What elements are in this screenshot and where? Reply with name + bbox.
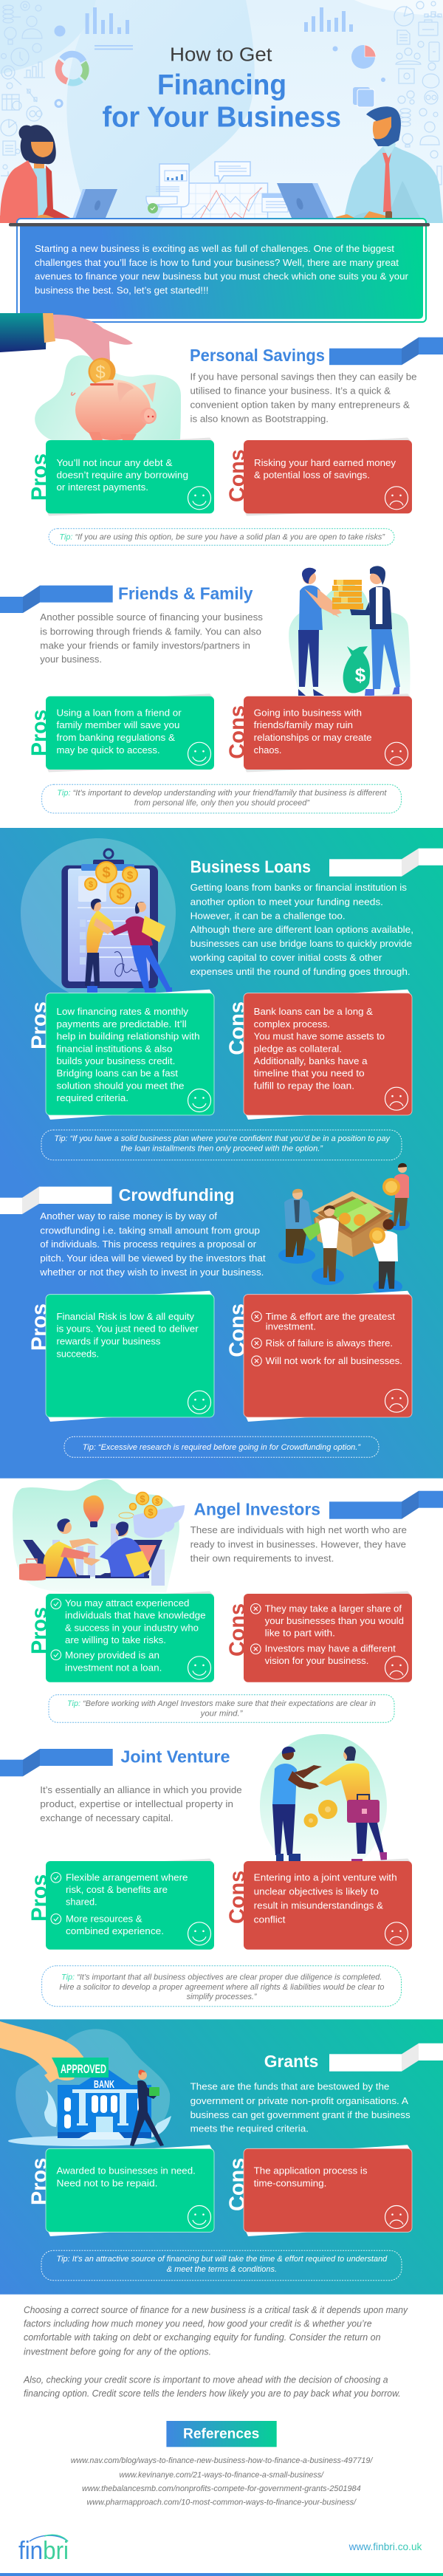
panel: pros: doesn’t require any borrowing: [56, 470, 188, 480]
panel: cons: Cons: [225, 1603, 250, 1657]
panel: pros: [27, 1291, 214, 1422]
body text: their own requirements to invest.: [190, 1552, 334, 1564]
panel: cons: Entering into a joint venture with: [254, 1872, 397, 1883]
body text: If you have personal savings then they can easily be: [190, 371, 416, 383]
section: grants: [0, 2021, 443, 2281]
panel: pros: Pros: [27, 1304, 52, 1351]
icon: sad face: [385, 1389, 408, 1412]
panel: cons: timeline that you need to: [254, 1069, 365, 1079]
panel: pros: rewards if your business: [56, 1336, 160, 1346]
references heading: References: [183, 2427, 259, 2442]
panel: cons: Investors may have a different: [265, 1643, 396, 1654]
section: joint venture: [0, 1734, 412, 2007]
tip: Tip: “If you are using this option, be sure you have a solid plan & you are open to take risks”: [59, 533, 385, 542]
panel: cons: & potential loss of savings.: [254, 470, 370, 480]
body text: It’s essentially an alliance in which you provide: [40, 1784, 242, 1795]
panel: cons: [225, 1591, 412, 1682]
ribbon: [0, 1187, 112, 1214]
panel: pros: financial institutions & also: [56, 1044, 172, 1054]
panel: pros: Awarded to businesses in need.: [56, 2166, 196, 2176]
body text: However, it can be a challenge too.: [190, 910, 346, 922]
center documents and line chart: [146, 162, 288, 223]
tip: Hire a solicitor to develop a proper agreement where all rights & liabilities would be clear to: [59, 1983, 385, 1992]
panel: pros: [27, 437, 214, 515]
heading: Angel Investors: [193, 1500, 320, 1519]
closing text: Choosing a correct source of finance for a new business is a critical task & it depends upon many: [24, 2305, 408, 2315]
body text: Getting loans from banks or financial institution is: [190, 882, 408, 893]
body text: [40, 1784, 242, 1823]
tip: [49, 1695, 394, 1722]
tip: your mind.”: [200, 1710, 244, 1719]
tip: Tip: “Before working with Angel Investors make sure that their expectations are clear in: [67, 1699, 376, 1708]
panel: introduction: business the best. So, let’s get started!!!: [35, 285, 208, 295]
panel: pros: Pros: [27, 1607, 52, 1654]
panel: pros: Low financing rates & monthly: [56, 1007, 189, 1017]
panel: cons: Cons: [225, 705, 250, 759]
icon: smiley: [188, 742, 211, 765]
panel: cons: [225, 693, 412, 773]
body text: These are individuals with high net worth who are: [190, 1524, 407, 1535]
body text: product, expertise or intellectual property in: [40, 1798, 233, 1809]
panel: cons: result in misunderstandings &: [254, 1900, 384, 1911]
illustration: clipboard, coins and handshake: $: [127, 869, 134, 882]
panel: cons: [225, 1858, 412, 1950]
chart: donut: [58, 54, 86, 83]
panel: cons: [225, 2145, 412, 2236]
panel: cons: Cons: [225, 1871, 250, 1924]
body text: whether or not they wish to invest in your business.: [39, 1267, 264, 1278]
panel: cons: Time & effort are the greatest: [266, 1312, 396, 1322]
panel: cons: Cons: [225, 449, 250, 502]
icon: smiley: [188, 1657, 211, 1679]
panel: cons: Will not work for all businesses.: [266, 1356, 402, 1366]
panel: pros: is yours. You just need to deliver: [56, 1324, 199, 1335]
body text: make your friends or family investors/partners in: [40, 640, 250, 651]
panel: introduction: avenues to finance your new business but you must check which one suits you & your: [35, 271, 409, 282]
panel: cons: investment.: [266, 1322, 316, 1332]
tip: [41, 2250, 402, 2281]
body text: pitch. Your idea will be viewed by the investors that: [40, 1253, 266, 1264]
body text: [190, 2081, 411, 2134]
body text: [190, 1524, 407, 1564]
title: for Your Business: [102, 102, 341, 134]
heading: Business Loans: [190, 857, 311, 876]
panel: pros: solution should you meet the: [56, 1080, 185, 1091]
ribbon: [329, 1491, 443, 1519]
body text: [40, 612, 264, 665]
ribbon: [329, 849, 443, 877]
panel: pros: or interest payments.: [56, 482, 148, 493]
panel: cons: your businesses than you would: [265, 1616, 404, 1626]
table edge: [9, 223, 430, 226]
tip: simplify processes.”: [187, 1993, 258, 2001]
closing text: Also, checking your credit score is important to move ahead with the decision of choosing a: [23, 2375, 388, 2385]
panel: cons: Cons: [225, 1001, 250, 1055]
body text: expenses until the round of funding goes through.: [190, 966, 411, 977]
panel: pros: Bridging loans can be a fast: [56, 1069, 179, 1079]
footer bar: [0, 2573, 443, 2576]
body text: another option to meet your funding needs.: [190, 897, 383, 907]
illustration: woman at laptop: [0, 125, 117, 223]
tip: [42, 1966, 401, 2007]
body text: Another possible source of financing your business: [40, 612, 264, 623]
heading: Crowdfunding: [119, 1185, 235, 1205]
body text: [190, 882, 413, 977]
panel: pros: [27, 990, 214, 1120]
body text: meets the required criteria.: [190, 2123, 309, 2134]
heading: Personal Savings: [190, 346, 325, 365]
panel: pros: investment not a loan.: [65, 1662, 162, 1673]
section: angel investors: [13, 1479, 443, 1722]
panel: pros: combined experience.: [66, 1926, 164, 1936]
panel: pros: [27, 2145, 214, 2236]
illustration: man at laptop: [277, 106, 443, 223]
section: friends and family: [0, 566, 412, 813]
section: personal savings: [0, 313, 443, 545]
icon: cross bullet: [252, 1312, 261, 1322]
references list: www.pharmapproach.com/10-most-common-ways-to-finance-your-business/: [87, 2498, 357, 2507]
references list: www.thebalancesmb.com/nonprofits-compete-for-government-grants-2501984: [82, 2484, 361, 2493]
body text: exchange of necessary capital.: [40, 1812, 174, 1823]
panel: cons: You must have some assets to: [254, 1032, 385, 1042]
panel: introduction: [17, 219, 426, 322]
illustration: people filling a box with money: [278, 1163, 410, 1294]
icon: sad face: [385, 487, 408, 510]
references list: www.nav.com/blog/ways-to-finance-new-business-how-to-finance-a-business-497719/: [71, 2456, 373, 2465]
references heading: [166, 2421, 277, 2447]
panel: cons: Bank loans can be a long &: [254, 1007, 374, 1017]
section: business loans: [21, 838, 443, 1160]
ribbon: [329, 2044, 443, 2072]
body text: business can get government grant if the business: [190, 2109, 411, 2120]
body text: utilised to finance your business. It’s a quick &: [190, 386, 391, 396]
illustration: two men exchanging coins and money bag: $: [355, 664, 366, 686]
logo: finbri: finbri: [18, 2537, 69, 2565]
ribbon: [0, 1749, 113, 1776]
panel: pros: may be quick to access.: [56, 745, 160, 756]
tip: Tip: It’s an attractive source of financing but will take the time & effort required to understand: [56, 2255, 388, 2264]
body text: crowdfunding i.e. taking small amount from group: [40, 1224, 260, 1236]
panel: pros: shared.: [66, 1897, 97, 1908]
hero banner: [0, 0, 443, 223]
illustration: hand approving bank loan: [0, 2021, 171, 2146]
illustration: two men exchanging coins and money bag: [289, 566, 411, 696]
panel: cons: Risking your hard earned money: [254, 458, 396, 468]
tip: [41, 1130, 402, 1160]
illustration: investor handshake through laptop: $: [155, 1498, 159, 1506]
panel: pros: individuals that have knowledge: [65, 1611, 206, 1621]
illustration: hand approving bank loan: APPROVED: [61, 2062, 106, 2076]
body text: government or private non-profit organisations. A: [190, 2095, 408, 2106]
background: blue green band two: [0, 2019, 443, 2295]
illustration: hand approving bank loan: BANK: [94, 2078, 114, 2091]
panel: pros: [27, 693, 214, 773]
panel: pros: Pros: [27, 710, 52, 756]
panel: pros: Financial Risk is low & all equity: [56, 1312, 195, 1322]
icon set: left business line icons: [1, 1, 45, 176]
body text: working capital to cover initial costs & other: [190, 952, 382, 963]
panel: pros: Need not to be repaid.: [56, 2178, 158, 2188]
icon: smiley: [188, 1391, 211, 1414]
icon: sad face: [385, 1657, 408, 1679]
illustration: investor handshake through laptop: [13, 1479, 185, 1594]
icon: smiley: [188, 487, 211, 510]
body text: [190, 371, 416, 424]
illustration: investor handshake through laptop: $: [148, 1507, 154, 1518]
tip: [64, 1436, 379, 1457]
icon: check bullet: [51, 1599, 61, 1609]
panel: introduction: challenges that you’ll face is how to fund your business? Well, there are many great: [35, 257, 399, 268]
tip: & meet the terms & conditions.: [167, 2265, 277, 2274]
icon: sad face: [385, 1922, 408, 1945]
panel: pros: [27, 1858, 214, 1950]
icon: sad face: [385, 1087, 408, 1110]
panel: cons: They may take a larger share of: [265, 1603, 402, 1614]
body text: Although there are different loan options available,: [190, 924, 413, 935]
panel: pros: You’ll not incur any debt &: [56, 458, 173, 468]
panel: pros: [27, 1591, 214, 1682]
panel: cons: Going into business with: [254, 708, 362, 718]
body text: businesses can use bridge loans to quickly provide: [190, 938, 412, 949]
panel: cons: pledge as collateral.: [254, 1044, 342, 1054]
panel: pros: payments are predictable. It’ll: [56, 1019, 187, 1030]
icon: smiley: [188, 2205, 211, 2229]
icon: cross bullet: [251, 1644, 261, 1654]
panel: pros: Pros: [27, 453, 52, 501]
tip: Tip: “It’s important to develop understanding with your friend/family that business is different: [57, 789, 387, 798]
panel: cons: unclear objectives is likely to: [254, 1887, 379, 1897]
chart: right bars: [304, 7, 353, 32]
panel: pros: You may attract experienced: [65, 1598, 189, 1609]
closing text: investment before going for any of the options.: [24, 2347, 211, 2357]
panel: pros: help in building relationship with: [56, 1032, 200, 1042]
illustration: clipboard, coins and handshake: $: [102, 865, 111, 881]
illustration: hand dropping coin into piggy bank: $: [95, 363, 106, 383]
illustration: clipboard, coins and handshake: $: [89, 880, 93, 889]
heading: Friends & Family: [118, 584, 253, 603]
panel: pros: required criteria.: [56, 1093, 128, 1103]
panel: cons: Additionally, banks have a: [254, 1056, 368, 1066]
tip: [42, 784, 401, 813]
heading: Grants: [264, 2052, 318, 2071]
heading: Joint Venture: [120, 1747, 230, 1767]
body text: Another way to raise money is by way of: [40, 1210, 217, 1222]
panel: pros: & success in your industry who: [65, 1623, 199, 1633]
icon: sad face: [385, 742, 408, 765]
icon: check bullet: [51, 1650, 61, 1660]
panel: pros: builds your business credit.: [56, 1056, 175, 1066]
panel: pros: from banking regulations &: [56, 733, 176, 743]
panel: pros: Pros: [27, 2158, 52, 2205]
illustration: hand dropping coin into piggy bank: [0, 313, 181, 440]
panel: pros: family member will save you: [56, 720, 179, 730]
panel: cons: [225, 437, 412, 515]
panel: cons: relationships or may create: [254, 733, 372, 743]
icon: cross bullet: [251, 1604, 261, 1614]
body text: is borrowing through friends & family. You can also: [40, 626, 261, 637]
panel: pros: risk, cost & benefits are: [66, 1885, 168, 1895]
panel: cons: [225, 990, 412, 1120]
panel: pros: Pros: [27, 1874, 52, 1922]
background: blue green band one: [0, 828, 443, 1479]
tip: Tip: “If you have a solid business plan where you’re confident that you’d be in a position to pay: [55, 1134, 391, 1143]
icon: sad face: [385, 2205, 408, 2229]
panel: cons: Risk of failure is always there.: [266, 1338, 393, 1349]
illustration: investor handshake through laptop: $: [140, 1493, 145, 1504]
section: crowdfunding: [0, 1163, 412, 1457]
panel: cons: friends/family may ruin: [254, 720, 353, 730]
panel: pros: Money provided is an: [65, 1651, 159, 1661]
panel: cons: The application process is: [254, 2166, 368, 2176]
panel: pros: Using a loan from a friend or: [56, 708, 182, 718]
panel: pros: succeeds.: [56, 1349, 99, 1359]
body text: your business.: [40, 654, 102, 665]
icon: smiley: [188, 1089, 211, 1112]
closing text: [23, 2305, 408, 2399]
panel: cons: vision for your business.: [265, 1656, 368, 1666]
panel: pros: are willing to take risks.: [65, 1635, 166, 1645]
panel: cons: time-consuming.: [254, 2178, 326, 2188]
illustration: clipboard, coins and handshake: $: [116, 886, 125, 902]
tip: [49, 529, 394, 545]
closing text: comfortable with taking on debt or exchanging equity for funding. Consider the return on: [24, 2332, 381, 2343]
chart: left bars: [86, 7, 129, 34]
title: Financing: [157, 69, 286, 101]
title: [102, 45, 341, 134]
icon: smiley: [188, 1922, 211, 1945]
panel: cons: chaos.: [254, 745, 282, 756]
tip: Tip: “It’s important that all business objectives are clear proper due diligence is completed.: [61, 1973, 382, 1982]
body text: of individuals. This process requires a proposal or: [40, 1239, 257, 1250]
panel: cons: [225, 1291, 412, 1422]
body text: ready to invest in businesses. However, they have: [190, 1539, 406, 1549]
panel: cons: Cons: [225, 1304, 250, 1357]
website: www.finbri.co.uk: [348, 2541, 422, 2552]
references list: [71, 2456, 373, 2507]
body text: is also known as Bootstrapping.: [190, 414, 329, 424]
closing text: factors including how much money you need, how good your credit is & whether you’re: [24, 2319, 372, 2329]
closing text: financing option. Credit score tells the lenders how likely you are to pay back what you borrow.: [24, 2388, 401, 2399]
body text: These are the funds that are bestowed by the: [190, 2081, 389, 2092]
tip: from personal life, only then you should proceed”: [134, 799, 310, 808]
references list: www.kevinanye.com/21-ways-to-finance-a-small-business/: [120, 2470, 324, 2479]
icon: check bullet: [51, 1873, 61, 1883]
panel: pros: Flexible arrangement where: [66, 1872, 188, 1883]
ribbon: [0, 586, 113, 613]
panel: introduction: Starting a new business is exciting as well as full of challenges. One of the biggest: [35, 243, 394, 254]
chart: pie: [351, 45, 376, 69]
panel: cons: Cons: [225, 2158, 250, 2211]
body text: convenient option taken by many entrepreneurs &: [190, 399, 410, 411]
icon set: right business line icons: [394, 1, 442, 185]
tip: Tip: “Excessive research is required before going in for Crowdfunding option.”: [83, 1443, 361, 1452]
icon: cross bullet: [252, 1338, 261, 1349]
panel: cons: conflict: [254, 1915, 286, 1925]
panel: cons: complex process.: [254, 1019, 330, 1030]
panel: cons: like to part with.: [265, 1628, 335, 1639]
icon: cross bullet: [252, 1356, 261, 1366]
title: How to Get: [170, 45, 272, 66]
panel: pros: More resources &: [66, 1914, 142, 1924]
panel: cons: fulfill to repay the loan.: [254, 1080, 354, 1091]
illustration: clipboard, coins and handshake: [21, 838, 176, 993]
panel: pros: Pros: [27, 1001, 52, 1049]
icon: check bullet: [51, 1914, 61, 1924]
ribbon: [329, 338, 443, 365]
illustration: business partners shaking hands: [260, 1734, 387, 1861]
body text: [39, 1210, 266, 1278]
tip: the loan installments then only proceed with the option.”: [121, 1145, 323, 1154]
